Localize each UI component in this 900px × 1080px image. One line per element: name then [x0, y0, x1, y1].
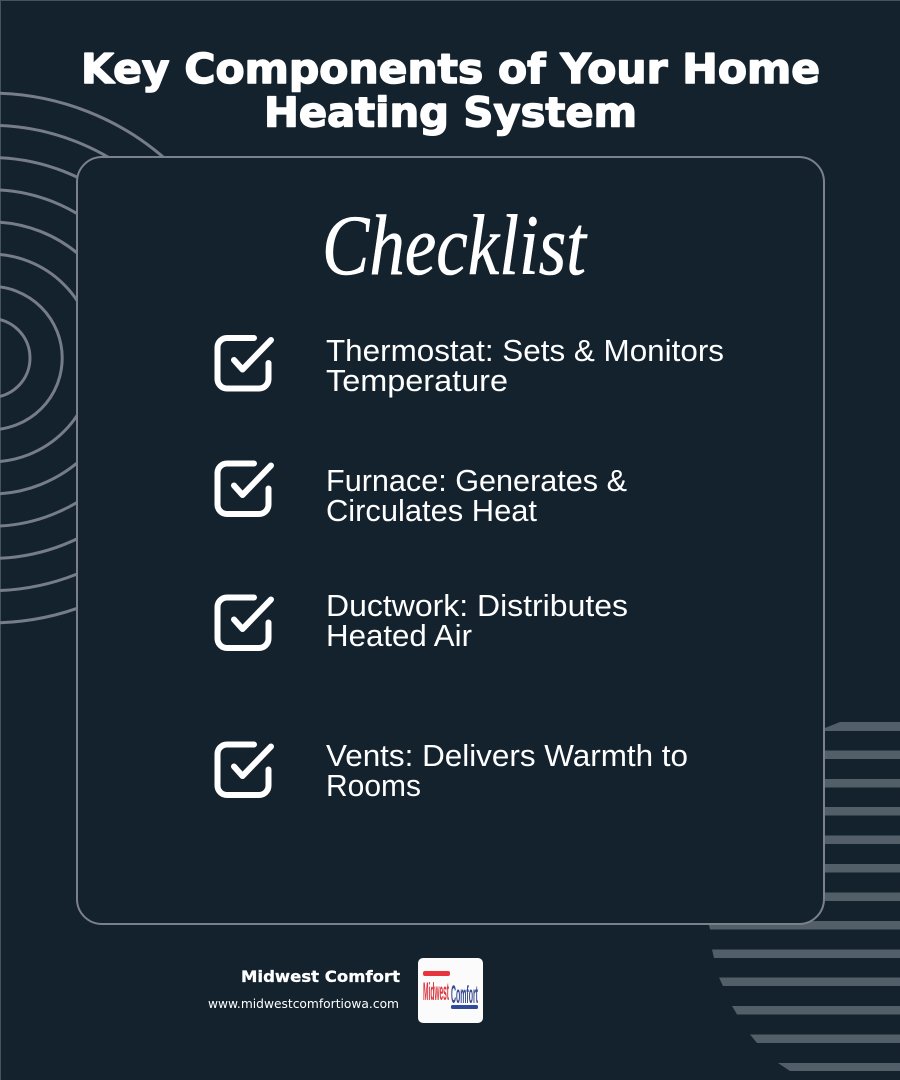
icon: checkbox [218, 338, 271, 388]
item: furnace [218, 464, 627, 528]
item: ductwork [218, 589, 628, 653]
text: vents: Vents: Delivers Warmth to [326, 739, 688, 773]
decorative stripes [708, 722, 900, 1071]
text: thermostat: Temperature [326, 364, 508, 398]
text: Comfort [451, 981, 478, 1009]
text: ductwork [326, 589, 628, 653]
item: vents [218, 739, 688, 803]
icon: checkbox [218, 464, 271, 514]
panel: checklist [77, 157, 824, 924]
text: ductwork: Ductwork: Distributes [326, 589, 628, 623]
logo: Midwest Comfort [418, 958, 483, 1023]
text: furnace: Circulates Heat [326, 494, 538, 528]
text: ductwork: Heated Air [326, 619, 472, 653]
text: thermostat: Thermostat: Sets & Monitors [326, 334, 724, 368]
heading: Checklist: Checklist [322, 197, 588, 293]
title [81, 45, 820, 136]
item: thermostat [218, 334, 724, 398]
text: vents [326, 739, 688, 803]
footer: website: www.midwestcomfortiowa.com [208, 997, 399, 1011]
text: furnace [326, 464, 627, 528]
text: furnace: Furnace: Generates & [326, 464, 627, 498]
text: vents: Rooms [326, 769, 421, 803]
title: Heating System [264, 88, 637, 136]
text: thermostat [326, 334, 724, 398]
footer: brand name: Midwest Comfort [241, 967, 400, 986]
logo: Midwest Comfort: Midwest [423, 978, 449, 1006]
icon: checkbox [218, 598, 271, 648]
title: Key Components of Your Home [81, 45, 820, 93]
decorative concentric arcs [0, 93, 255, 623]
icon: checkbox [218, 744, 271, 795]
